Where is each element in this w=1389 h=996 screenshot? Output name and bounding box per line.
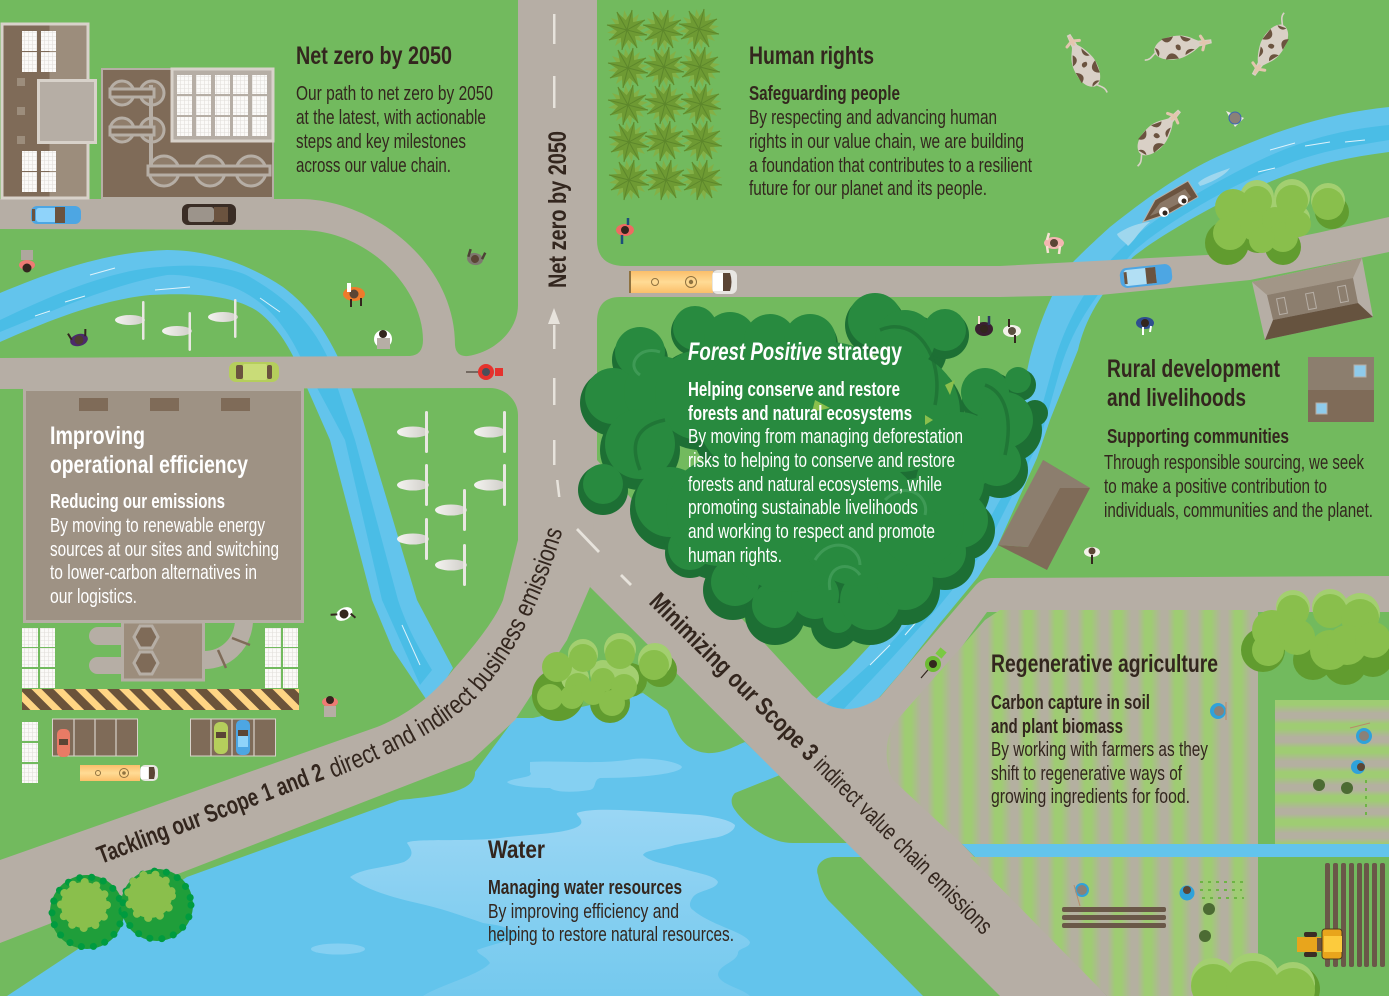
lake highlight main bbox=[350, 810, 750, 996]
lake highlight upper bbox=[507, 759, 682, 792]
body: By moving from managing deforestation bbox=[688, 425, 963, 448]
body: By working with farmers as they bbox=[991, 738, 1209, 761]
field: lower plot bbox=[970, 857, 1258, 996]
wind turbines: right group bbox=[397, 411, 506, 586]
wind turbines: left group bbox=[115, 299, 238, 351]
person: dark pair left bbox=[975, 316, 993, 336]
crop rows: tractor field bbox=[1325, 863, 1385, 967]
bus: top road bbox=[629, 270, 737, 294]
heading: Improving bbox=[50, 422, 145, 450]
parking right bbox=[190, 719, 276, 756]
heading: Rural development bbox=[1107, 355, 1281, 383]
heading: Water bbox=[488, 836, 545, 864]
building: operational efficiency panel bbox=[24, 390, 302, 622]
body: risks to helping to conserve and restore bbox=[688, 449, 955, 472]
car: blue top left bbox=[31, 206, 81, 224]
heading bbox=[1107, 355, 1281, 412]
heading: operational efficiency bbox=[50, 451, 248, 479]
lake bbox=[7, 693, 923, 996]
body: helping to restore natural resources. bbox=[488, 923, 734, 946]
person: purple bbox=[68, 329, 89, 348]
road markings bbox=[548, 14, 632, 586]
bush: regenerative field bbox=[1241, 589, 1389, 685]
body bbox=[488, 900, 734, 946]
bush: top right bbox=[1205, 179, 1349, 265]
body: sources at our sites and switching bbox=[50, 538, 279, 561]
body bbox=[688, 425, 963, 567]
body: By moving to renewable energy bbox=[50, 514, 266, 537]
boat wake bbox=[1117, 168, 1230, 246]
road label: minimizing scope 3: Minimizing our Scope 3 bbox=[644, 587, 824, 767]
body: shift to regenerative ways of bbox=[991, 762, 1182, 785]
tractor bbox=[1297, 929, 1342, 959]
canal bbox=[962, 844, 1389, 857]
body: By improving efficiency and bbox=[488, 900, 679, 923]
text: water bbox=[488, 836, 734, 946]
car: lime bbox=[229, 362, 279, 382]
text: improving operational efficiency bbox=[50, 422, 279, 608]
cyclist: green bbox=[921, 647, 947, 678]
body: growing ingredients for food. bbox=[991, 785, 1190, 808]
bush: centre bbox=[532, 633, 677, 723]
body: future for our planet and its people. bbox=[749, 177, 987, 200]
people bbox=[19, 111, 1372, 906]
forest bbox=[578, 293, 1048, 649]
body: to lower-carbon alternatives in bbox=[50, 561, 257, 584]
text: forest positive strategy bbox=[688, 338, 963, 567]
road label: net zero by 2050: Net zero by 2050 bbox=[544, 131, 572, 288]
cows bbox=[1058, 10, 1300, 169]
river right bbox=[815, 107, 1389, 722]
road label: tackling scope 1 and 2 bbox=[93, 528, 562, 870]
truck: site bbox=[80, 765, 158, 781]
body bbox=[50, 514, 279, 608]
body bbox=[1104, 451, 1373, 522]
road: top right bbox=[597, 217, 1389, 322]
body: By respecting and advancing human bbox=[749, 106, 997, 129]
boat bbox=[1143, 181, 1198, 222]
car: dark bbox=[182, 204, 236, 225]
field: right plot bbox=[1275, 700, 1389, 844]
subheading: and plant biomass bbox=[991, 716, 1123, 738]
person: navy bbox=[1136, 317, 1154, 335]
lake highlight small bbox=[311, 944, 365, 954]
bush: bottom bbox=[1191, 953, 1320, 996]
subheading: Safeguarding people bbox=[749, 83, 900, 105]
road: scope 3 diagonal and branch bbox=[590, 460, 1389, 996]
body bbox=[991, 738, 1209, 808]
crop rows: lower plot bbox=[1062, 907, 1166, 928]
subheading: Helping conserve and restore bbox=[688, 379, 900, 401]
body: forests and natural ecosystems, while bbox=[688, 473, 942, 496]
heading: and livelihoods bbox=[1107, 384, 1246, 412]
house: square roof bbox=[1308, 357, 1374, 422]
body: rights in our value chain, we are building bbox=[749, 130, 1024, 153]
road label: minimizing scope 3 bbox=[644, 587, 998, 940]
text: rural development bbox=[1104, 355, 1373, 522]
heading: strategy bbox=[827, 338, 902, 366]
body: across our value chain. bbox=[296, 154, 451, 177]
person: hat by river bbox=[1226, 111, 1244, 127]
subheading bbox=[991, 692, 1150, 738]
text: regenerative agriculture bbox=[991, 650, 1218, 808]
heading: Net zero by 2050 bbox=[296, 42, 452, 70]
person: white and black bbox=[331, 604, 356, 628]
house: top right bbox=[1252, 258, 1373, 340]
heading: Human rights bbox=[749, 42, 874, 70]
body: and working to respect and promote bbox=[688, 520, 935, 543]
solar panels: site bbox=[22, 628, 298, 783]
person: pink carrying box bbox=[322, 696, 338, 717]
plants bbox=[1199, 779, 1353, 942]
body: steps and key milestones bbox=[296, 130, 466, 153]
person: white and pink bbox=[1044, 233, 1064, 254]
house: by forest bbox=[998, 460, 1090, 570]
body: Our path to net zero by 2050 bbox=[296, 82, 493, 105]
parking left bbox=[52, 719, 138, 757]
person: red near palms bbox=[616, 218, 634, 244]
river left bbox=[0, 250, 453, 705]
road: top left loop bbox=[0, 199, 518, 415]
subheading: forests and natural ecosystems bbox=[688, 403, 912, 425]
heading: Regenerative agriculture bbox=[991, 650, 1218, 678]
text: net zero by 2050 bbox=[296, 42, 493, 177]
bush: pair of round shrubs bbox=[50, 869, 193, 949]
person: grey bbox=[466, 249, 485, 266]
subheading: Carbon capture in soil bbox=[991, 692, 1150, 714]
seedlings bbox=[1200, 780, 1366, 898]
person: white with box bbox=[374, 330, 392, 349]
subheading: Managing water resources bbox=[488, 877, 682, 899]
body: a foundation that contributes to a resilient bbox=[749, 154, 1032, 177]
road: main vertical bbox=[518, 0, 597, 560]
person: white pair right bbox=[1003, 319, 1021, 343]
building: water treatment plant bbox=[102, 69, 273, 198]
hazard stripe barrier bbox=[22, 689, 299, 710]
palm plantation bbox=[602, 4, 727, 205]
body: human rights. bbox=[688, 544, 782, 567]
building: left factory bbox=[2, 24, 96, 198]
body: our logistics. bbox=[50, 585, 137, 608]
subheading: Reducing our emissions bbox=[50, 491, 225, 513]
site: pipes and tanks bbox=[89, 622, 250, 680]
body bbox=[749, 106, 1032, 200]
road: scope 1 and 2 diagonal bbox=[0, 540, 597, 943]
body: at the latest, with actionable bbox=[296, 106, 486, 129]
person: orange bbox=[343, 283, 365, 307]
body: promoting sustainable livelihoods bbox=[688, 496, 918, 519]
heading bbox=[50, 422, 248, 479]
field: main regenerative plot bbox=[887, 610, 1258, 844]
road label: tackling scope 1 and 2: direct and indirect business emissions bbox=[330, 528, 562, 777]
person: pink with box bbox=[19, 250, 35, 272]
heading: Forest Positive bbox=[688, 338, 822, 366]
car: blue top right bbox=[1119, 263, 1173, 289]
road label: tackling scope 1 and 2: Tackling our Scope 1 and 2 bbox=[93, 758, 327, 870]
person: by house bbox=[1084, 547, 1100, 564]
body bbox=[296, 82, 493, 177]
text: human rights bbox=[749, 42, 1032, 200]
subheading bbox=[688, 379, 912, 425]
road label: minimizing scope 3: indirect value chain emissions bbox=[808, 752, 998, 940]
farmers bbox=[1210, 702, 1226, 720]
cyclist: red bbox=[466, 364, 503, 380]
subheading: Supporting communities bbox=[1107, 426, 1289, 448]
